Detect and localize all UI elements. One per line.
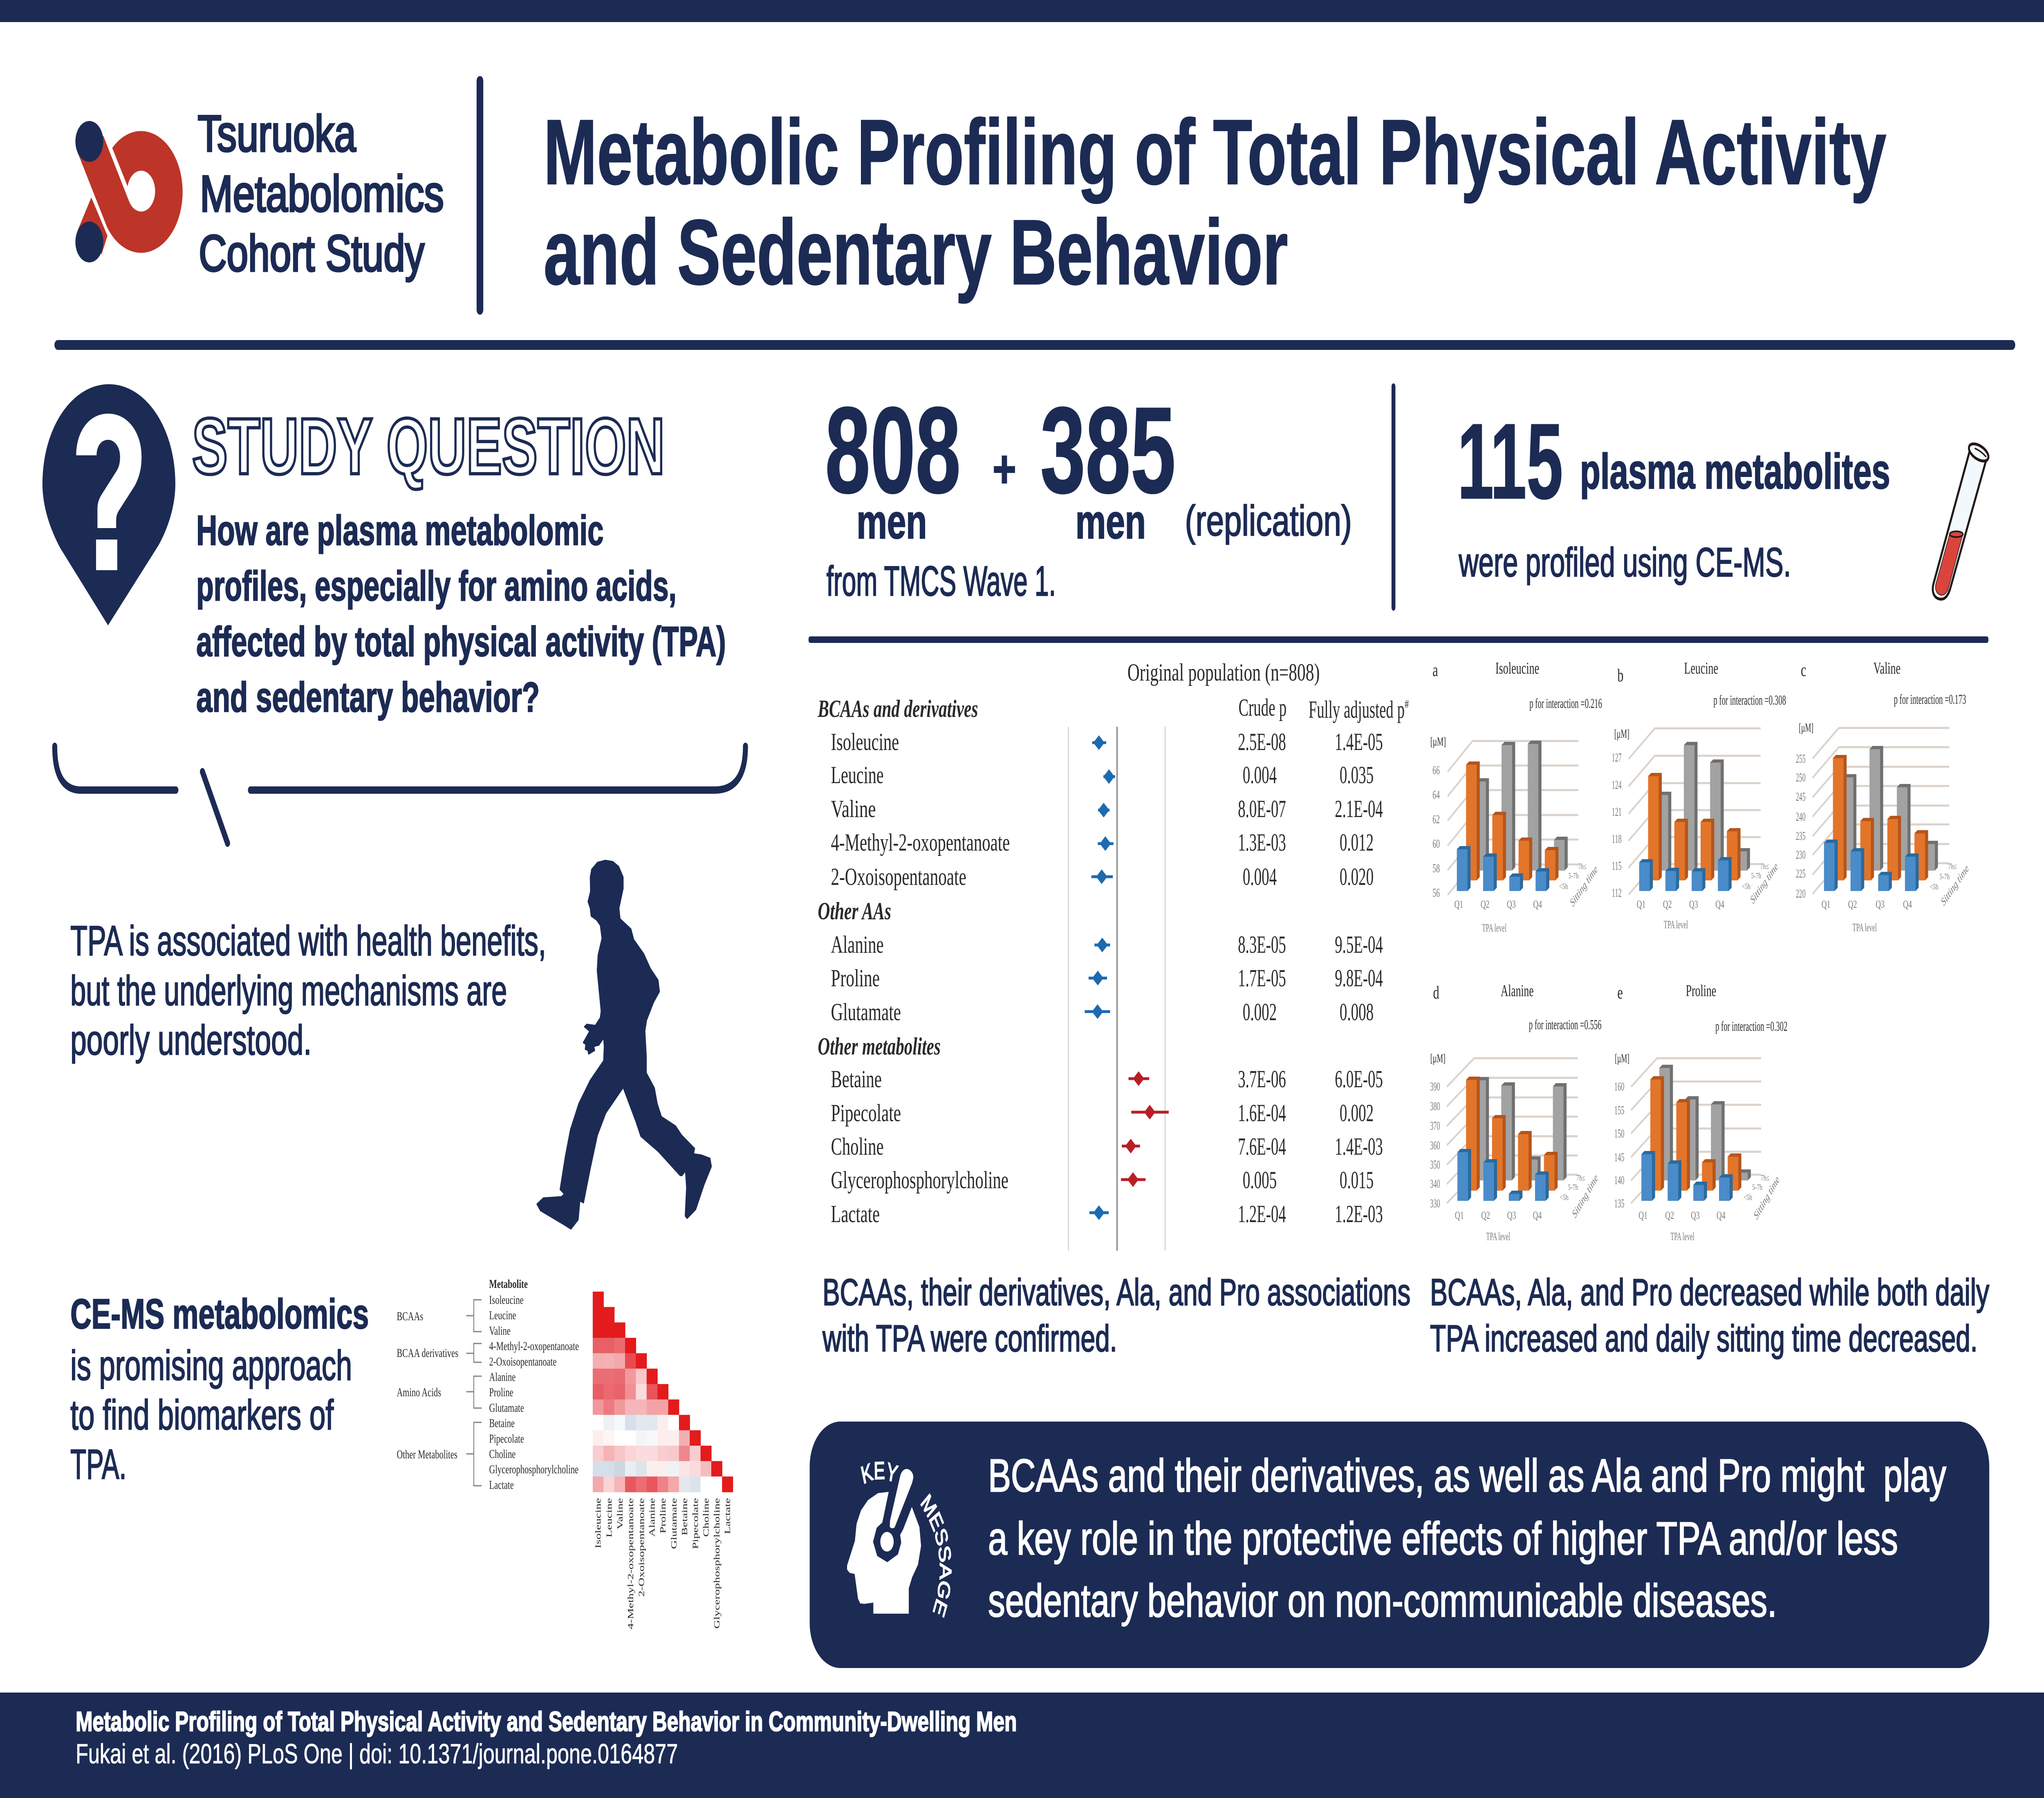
fully adjusted p values: 1.4E-05 — [1335, 728, 1383, 756]
footer citation: Fukai et al. (2016) PLoS One | doi: 10.1371/journal.pone.0164877 — [76, 1738, 678, 1769]
chart a: Isoleucine: 60 — [1432, 837, 1440, 851]
key message text: a key role in the protective effects of higher TPA and/or less — [988, 1512, 1898, 1565]
forest plot row labels: Pipecolate — [831, 1099, 901, 1127]
chart e: Proline: Sitting time — [1752, 1174, 1782, 1222]
chart c: Valine: p for interaction =0.173 — [1894, 692, 1966, 707]
chart d: Alanine: 360 — [1430, 1138, 1440, 1152]
fully adjusted p values: 6.0E-05 — [1335, 1066, 1383, 1093]
forest plot row labels: 2-Oxoisopentanoate — [831, 863, 966, 891]
chart e: Proline: Q3 — [1691, 1209, 1700, 1221]
crude p values: 8.3E-05 — [1238, 931, 1286, 958]
forest plot row labels: Other AAs — [818, 898, 891, 925]
title — [544, 101, 1886, 304]
heatmap column labels: Proline — [658, 1498, 668, 1534]
heatmap column labels: Glycerophosphorylcholine — [712, 1498, 722, 1629]
heatmap column labels: 2-Oxoisopentanoate — [637, 1498, 646, 1596]
forest plot row labels: Glycerophosphorylcholine — [831, 1167, 1009, 1194]
heatmap group labels: Other Metabolites — [397, 1447, 457, 1461]
text: study question body: and sedentary behavior? — [196, 674, 540, 721]
chart d: Alanine: Q1 — [1455, 1209, 1464, 1221]
chart b: Leucine: Q1 — [1637, 898, 1645, 910]
chart d: Alanine: 380 — [1430, 1099, 1440, 1113]
forest plot row labels: Glutamate — [831, 999, 901, 1026]
logo wordmark: Cohort Study — [199, 225, 425, 282]
chart e: Proline: 140 — [1614, 1173, 1625, 1187]
forest plot header: # — [1405, 697, 1409, 711]
chart e: Proline: 7h≤ — [1761, 1173, 1769, 1182]
chart c: Valine: 235 — [1796, 829, 1806, 843]
chart a: Isoleucine: 58 — [1432, 861, 1440, 875]
chart e: Proline: 145 — [1614, 1150, 1625, 1164]
forest plot header: Original population (n=808) — [1127, 659, 1320, 686]
crude p values: 0.004 — [1243, 863, 1277, 891]
chart e: Proline: 155 — [1614, 1103, 1625, 1117]
chart e: Proline: [µM] — [1615, 1051, 1629, 1065]
logo: Tsuruoka Metabolomics Cohort Study — [75, 105, 444, 282]
heatmap row labels: Choline — [489, 1447, 515, 1461]
chart b: Leucine: 7h≤ — [1760, 862, 1769, 871]
chart d: Alanine: 330 — [1430, 1196, 1440, 1210]
heatmap group labels — [397, 1309, 458, 1461]
forest plot row labels — [818, 695, 1010, 1228]
text: TPA background: TPA is associated with health benefits, — [70, 917, 546, 964]
forest plot row labels: Valine — [831, 795, 876, 823]
heatmap column labels: Leucine — [604, 1498, 614, 1538]
fully adjusted p values: 9.8E-04 — [1335, 965, 1383, 992]
fully adjusted p values: 0.008 — [1340, 999, 1374, 1026]
chart e: Proline: Proline — [1686, 982, 1716, 1000]
chart d: Alanine: p for interaction =0.556 — [1529, 1017, 1601, 1032]
forest plot header: Fully adjusted p — [1309, 696, 1405, 723]
chart b: Leucine: [µM] — [1614, 727, 1629, 741]
chart e: Proline: e — [1617, 983, 1623, 1003]
forest plot row labels: Proline — [831, 965, 880, 992]
text: TPA background: but the underlying mechanisms are — [70, 967, 507, 1014]
chart d: Alanine: Alanine — [1501, 982, 1534, 1000]
icon: question mark pin — [43, 384, 175, 625]
forest plot row labels: Isoleucine — [831, 728, 899, 756]
fully adjusted p values: 0.015 — [1340, 1167, 1374, 1194]
fully adjusted p values — [1335, 728, 1383, 1228]
chart b: Leucine: 121 — [1612, 805, 1622, 819]
logo wordmark: Metabolomics — [200, 165, 444, 222]
chart a: Isoleucine: p for interaction =0.216 — [1529, 696, 1602, 711]
heatmap row labels: Proline — [489, 1385, 513, 1399]
caption: forest plot finding: BCAAs, their derivatives, Ala, and Pro associations — [823, 1271, 1410, 1313]
chart b: Leucine: 127 — [1612, 750, 1622, 764]
logo wordmark: Tsuruoka — [198, 105, 356, 162]
chart e: Proline: p for interaction =0.302 — [1715, 1019, 1787, 1034]
chart a: Isoleucine: Q4 — [1533, 898, 1542, 910]
chart b: Leucine: Q4 — [1715, 898, 1724, 910]
crude p values: 1.6E-04 — [1238, 1099, 1286, 1127]
text: study question body: How are plasma metabolomic — [196, 507, 604, 554]
chart c: Valine: TPA level — [1852, 921, 1877, 934]
chart d: Alanine: 390 — [1430, 1079, 1440, 1093]
panel: key message — [810, 1422, 1989, 1668]
heatmap row labels: Betaine — [489, 1416, 515, 1430]
chart d: Alanine: 7h≤ — [1576, 1173, 1585, 1182]
logo mark — [75, 121, 183, 262]
caption: forest plot finding: with TPA were confirmed. — [822, 1317, 1117, 1359]
icon: test tube — [1933, 440, 1990, 599]
heatmap column labels: Lactate — [723, 1498, 732, 1534]
fully adjusted p values: 1.4E-03 — [1335, 1133, 1383, 1160]
forest plot row labels: Lactate — [831, 1200, 880, 1228]
heatmap row labels: 4-Methyl-2-oxopentanoate — [489, 1339, 579, 1353]
chart c: Valine: 220 — [1796, 887, 1806, 900]
heatmap row labels: Lactate — [489, 1478, 514, 1491]
chart e: Proline: 160 — [1614, 1079, 1625, 1093]
chart a: Isoleucine — [1430, 659, 1602, 934]
chart e: Proline: Q1 — [1638, 1209, 1647, 1221]
chart a: Isoleucine: [µM] — [1430, 734, 1446, 748]
forest plot row labels: Other metabolites — [818, 1033, 941, 1060]
text: CE-MS metabolomics: CE-MS metabolomics — [70, 1290, 369, 1337]
text: replication: (replication) — [1185, 497, 1352, 545]
text: TPA background — [70, 917, 546, 1064]
crude p values — [1238, 728, 1286, 1228]
chart d: Alanine: 340 — [1430, 1177, 1440, 1191]
chart b: Leucine — [1612, 659, 1786, 931]
heatmap row labels — [489, 1277, 579, 1491]
heatmap row labels: Alanine — [489, 1370, 515, 1384]
chart d: Alanine: 5-7h — [1568, 1182, 1578, 1192]
fully adjusted p values: 0.002 — [1340, 1099, 1374, 1127]
heatmap column labels: 4-Methyl-2-oxopentanoate — [626, 1498, 635, 1629]
forest plot blue points — [1085, 735, 1115, 1220]
chart d: Alanine: Q4 — [1533, 1209, 1542, 1221]
heatmap column labels: Pipecolate — [690, 1498, 700, 1549]
heatmap cells — [593, 1292, 733, 1492]
text: TPA background: poorly understood. — [70, 1017, 312, 1064]
footer — [0, 1693, 2044, 1798]
icon: running man — [537, 860, 711, 1229]
crude p values: 8.0E-07 — [1238, 795, 1286, 823]
chart c: Valine: 240 — [1796, 810, 1806, 824]
crude p values: 0.005 — [1243, 1167, 1277, 1194]
heatmap column labels: Alanine — [647, 1498, 657, 1537]
chart b: Leucine: Leucine — [1684, 659, 1718, 677]
chart c: Valine: <5h — [1930, 882, 1939, 891]
chart a: Isoleucine: 62 — [1432, 812, 1440, 826]
fully adjusted p values: 0.012 — [1340, 829, 1374, 856]
chart c: Valine: 245 — [1796, 790, 1806, 804]
chart: forest plot table — [818, 659, 1409, 1251]
chart c: Valine: 250 — [1796, 770, 1806, 784]
key message text: BCAAs and their derivatives, as well as Ala and Pro might play — [988, 1449, 1947, 1502]
forest plot row labels: Betaine — [831, 1066, 882, 1093]
chart b: Leucine: 124 — [1612, 778, 1622, 792]
heatmap row labels: 2-Oxoisopentanoate — [489, 1355, 556, 1368]
text: CE-MS metabolomics: to find biomarkers of — [70, 1391, 334, 1438]
forest plot row labels: Choline — [831, 1133, 884, 1160]
chart e: Proline: 150 — [1614, 1126, 1625, 1140]
heatmap row labels: Isoleucine — [489, 1293, 524, 1307]
caption: bar chart finding: TPA increased and daily sitting time decreased. — [1430, 1317, 1977, 1359]
chart c: Valine: Q3 — [1876, 898, 1885, 910]
crude p values: 7.6E-04 — [1238, 1133, 1286, 1160]
chart b: Leucine: Q2 — [1663, 898, 1672, 910]
chart a: Isoleucine: Q1 — [1455, 898, 1463, 910]
text: CE-MS metabolomics: TPA. — [70, 1441, 126, 1488]
heatmap row labels: Valine — [489, 1324, 511, 1337]
chart b: Leucine: Q3 — [1689, 898, 1698, 910]
chart c: Valine: 5-7h — [1939, 872, 1950, 881]
heatmap column labels: Betaine — [679, 1498, 689, 1536]
stat: 115 plasma metabolites — [1457, 401, 1890, 521]
stat: 385 men: 385 — [1040, 382, 1176, 519]
chart c: Valine: Q1 — [1822, 898, 1830, 910]
forest plot reference lines — [1069, 727, 1165, 1251]
heatmap group labels: BCAA derivatives — [397, 1346, 458, 1360]
chart a: Isoleucine: Isoleucine — [1495, 659, 1539, 677]
chart d: Alanine: [µM] — [1430, 1051, 1446, 1065]
chart d: Alanine: TPA level — [1486, 1230, 1510, 1243]
chart b: Leucine: <5h — [1742, 882, 1750, 891]
chart c: Valine: 225 — [1796, 867, 1806, 880]
chart b: Leucine: p for interaction =0.308 — [1713, 693, 1786, 708]
crude p values: 1.3E-03 — [1238, 829, 1286, 856]
chart d: Alanine: d — [1433, 983, 1439, 1003]
chart b: Leucine: 112 — [1612, 886, 1622, 900]
top bar — [0, 0, 2044, 22]
title: and Sedentary Behavior — [544, 201, 1288, 304]
chart d: Alanine: Sitting time — [1571, 1172, 1600, 1220]
text: CE-MS metabolomics: is promising approach — [70, 1342, 352, 1389]
chart a: Isoleucine: a — [1432, 660, 1438, 681]
chart c: Valine: 7h≤ — [1948, 862, 1957, 871]
forest plot row labels: Alanine — [831, 931, 884, 958]
heading: study question: STUDY QUESTION — [192, 402, 665, 491]
crude p values: 0.004 — [1243, 761, 1277, 789]
chart c: Valine: 255 — [1796, 752, 1806, 766]
chart e: Proline: 135 — [1614, 1196, 1625, 1210]
chart b: Leucine: 115 — [1612, 859, 1622, 873]
text: study question body: affected by total physical activity (TPA) — [196, 618, 726, 665]
chart: metabolite correlation heatmap — [397, 1277, 733, 1629]
speech bracket — [55, 746, 746, 843]
fully adjusted p values: 1.2E-03 — [1335, 1200, 1383, 1228]
chart d: Alanine: 370 — [1430, 1119, 1440, 1133]
chart c: Valine: 230 — [1796, 848, 1806, 862]
chart d: Alanine: Q2 — [1481, 1209, 1490, 1221]
chart a: Isoleucine: Q3 — [1507, 898, 1516, 910]
chart d: Alanine: Q3 — [1507, 1209, 1516, 1221]
logo wordmark — [198, 105, 444, 282]
caption: bar chart finding — [1430, 1271, 1990, 1359]
text: profiled using CE-MS: were profiled using CE-MS. — [1459, 540, 1791, 585]
chart e: Proline: 5-7h — [1752, 1182, 1762, 1192]
heatmap row labels: Leucine — [489, 1308, 516, 1322]
chart c: Valine: Sitting time — [1939, 862, 1971, 908]
forest plot row labels: BCAAs and derivatives — [818, 695, 978, 723]
forest plot red points — [1121, 1071, 1169, 1187]
chart a: Isoleucine: 5-7h — [1569, 871, 1579, 880]
heatmap column labels: Choline — [701, 1498, 710, 1537]
chart b: Leucine: b — [1617, 665, 1623, 686]
heatmap row labels: Glutamate — [489, 1401, 524, 1415]
forest plot row labels: 4-Methyl-2-oxopentanoate — [831, 829, 1010, 856]
chart b: Leucine: 5-7h — [1751, 871, 1762, 880]
crude p values: 1.2E-04 — [1238, 1200, 1286, 1228]
chart c: Valine: Q4 — [1903, 898, 1912, 910]
chart c: Valine: [µM] — [1799, 721, 1813, 734]
chart d: Alanine — [1430, 982, 1601, 1243]
forest plot row labels: Leucine — [831, 761, 884, 789]
heatmap row labels: Glycerophosphorylcholine — [489, 1462, 578, 1476]
chart b: Leucine: 118 — [1612, 832, 1622, 846]
title: Metabolic Profiling of Total Physical Activity — [544, 101, 1886, 204]
key message curved label: KEY — [858, 1456, 900, 1489]
text: study question body — [196, 507, 726, 721]
heatmap row labels: Pipecolate — [489, 1431, 524, 1445]
fully adjusted p values: 2.1E-04 — [1335, 795, 1383, 823]
chart c: Valine — [1796, 659, 1971, 934]
crude p values: 3.7E-06 — [1238, 1066, 1286, 1093]
text: from TMCS Wave 1: from TMCS Wave 1. — [827, 558, 1056, 605]
fully adjusted p values: 0.035 — [1340, 761, 1374, 789]
chart e: Proline — [1614, 982, 1787, 1243]
forest plot header: Crude p — [1239, 694, 1286, 721]
caption: bar chart finding: BCAAs, Ala, and Pro decreased while both daily — [1430, 1271, 1990, 1313]
chart a: Isoleucine: Q2 — [1481, 898, 1490, 910]
icon: head with headphone and exclamation — [847, 1469, 921, 1614]
plus sign: + — [993, 439, 1016, 499]
forest plot header — [1127, 659, 1409, 723]
heatmap group labels: BCAAs — [397, 1309, 423, 1323]
chart e: Proline: Q4 — [1717, 1209, 1726, 1221]
key message text — [988, 1449, 1947, 1627]
chart d: Alanine: 350 — [1430, 1158, 1440, 1171]
fully adjusted p values: 9.5E-04 — [1335, 931, 1383, 958]
chart b: Leucine: Sitting time — [1749, 860, 1780, 906]
key message curved label: MESSAGE — [917, 1489, 955, 1620]
heatmap column labels: Glutamate — [669, 1498, 679, 1549]
crude p values: 0.002 — [1243, 999, 1277, 1026]
text: CE-MS metabolomics — [70, 1290, 369, 1488]
chart a: Isoleucine: TPA level — [1482, 921, 1506, 934]
stat: 385 men: men — [1076, 495, 1146, 549]
fully adjusted p values: 0.020 — [1340, 863, 1374, 891]
stat: 115 plasma metabolites: 115 — [1457, 401, 1563, 521]
crude p values: 2.5E-08 — [1238, 728, 1286, 756]
stat: 115 plasma metabolites: plasma metabolites — [1580, 443, 1890, 499]
key message curved label — [858, 1456, 955, 1620]
chart b: Leucine: TPA level — [1664, 918, 1688, 931]
footer citation: Metabolic Profiling of Total Physical Activity and Sedentary Behavior in Community-Dwelling Men — [76, 1706, 1017, 1737]
crude p values: 1.7E-05 — [1238, 965, 1286, 992]
chart d: Alanine: <5h — [1560, 1193, 1569, 1202]
chart a: Isoleucine: 64 — [1432, 788, 1440, 802]
heatmap column labels: Valine — [615, 1498, 625, 1529]
caption: forest plot finding — [822, 1271, 1410, 1359]
chart c: Valine: Q2 — [1848, 898, 1857, 910]
chart c: Valine: c — [1801, 660, 1806, 681]
heatmap column labels: Isoleucine — [593, 1498, 603, 1548]
chart a: Isoleucine: <5h — [1559, 882, 1568, 891]
heatmap column labels — [593, 1498, 732, 1629]
chart c: Valine: Valine — [1874, 659, 1901, 677]
key message text: sedentary behavior on non-communicable diseases. — [988, 1574, 1777, 1627]
chart e: Proline: Q2 — [1665, 1209, 1674, 1221]
chart e: Proline: <5h — [1744, 1193, 1752, 1202]
stat: 808 men: men — [856, 495, 927, 549]
chart a: Isoleucine: 56 — [1432, 886, 1440, 900]
chart a: Isoleucine: Sitting time — [1568, 863, 1600, 909]
chart a: Isoleucine: 66 — [1432, 763, 1440, 777]
heatmap row labels: Metabolite — [489, 1277, 528, 1291]
heatmap group labels: Amino Acids — [397, 1385, 441, 1399]
text: study question body: profiles, especially for amino acids, — [196, 562, 677, 609]
chart a: Isoleucine: 7h≤ — [1578, 862, 1587, 871]
footer citation — [76, 1706, 1017, 1769]
stat: 808 men: 808 — [825, 382, 961, 519]
chart e: Proline: TPA level — [1670, 1230, 1694, 1243]
